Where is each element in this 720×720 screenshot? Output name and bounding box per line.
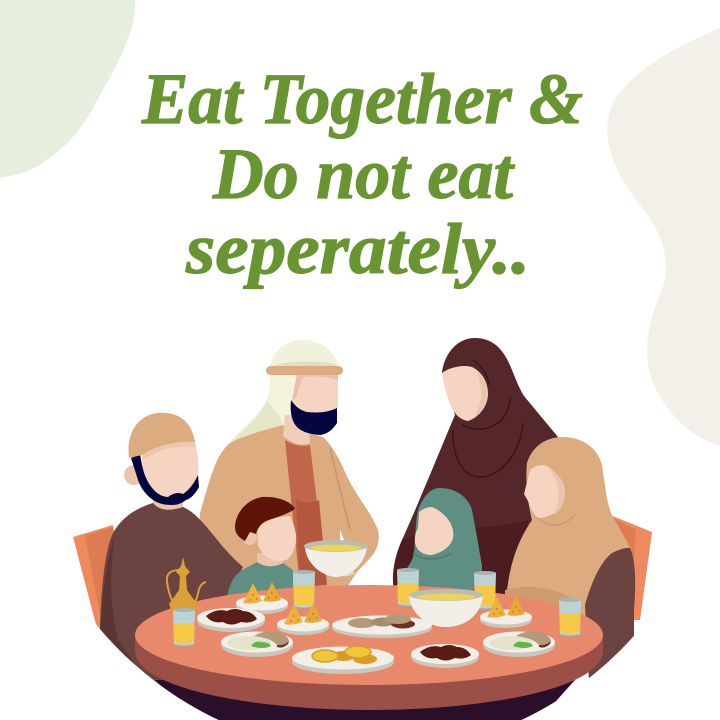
headcloth bbox=[230, 375, 297, 442]
background blob: right bbox=[607, 28, 720, 446]
title: seperately.. bbox=[185, 209, 530, 289]
bowl on table bbox=[409, 589, 483, 627]
shirt bbox=[285, 440, 327, 587]
title: Eat Together & bbox=[141, 59, 583, 139]
neck bbox=[283, 415, 310, 444]
beard bbox=[131, 454, 199, 505]
face bbox=[524, 465, 565, 518]
table side bbox=[135, 635, 603, 710]
boy bbox=[228, 497, 296, 600]
cap bbox=[128, 413, 195, 458]
seated man in brown bbox=[100, 413, 243, 700]
golden fritter plate bbox=[292, 646, 394, 674]
biscuit plate bbox=[332, 614, 432, 638]
ear bbox=[124, 465, 140, 485]
face bbox=[415, 507, 453, 555]
cap bbox=[270, 340, 338, 368]
date plates bbox=[197, 608, 479, 668]
rice plates bbox=[221, 631, 555, 657]
standing man bbox=[200, 340, 379, 590]
head band bbox=[266, 366, 343, 375]
title: Do not eat bbox=[212, 134, 515, 214]
table base shadow bbox=[155, 680, 575, 720]
right chair bbox=[612, 516, 652, 620]
robe bbox=[200, 425, 379, 590]
shirt bbox=[228, 562, 293, 595]
jug bbox=[167, 557, 206, 612]
body bbox=[100, 503, 243, 700]
samosa plates bbox=[236, 582, 532, 635]
woman in tan hijab bbox=[505, 437, 635, 700]
neck bbox=[153, 495, 183, 510]
neck bbox=[257, 553, 283, 566]
title bbox=[141, 59, 583, 289]
hijab folds bbox=[453, 423, 523, 477]
table top bbox=[135, 585, 603, 685]
face bbox=[292, 376, 338, 412]
illustration: family meal bbox=[73, 338, 652, 720]
held bowl bbox=[304, 540, 368, 577]
large woman in maroon hijab bbox=[393, 338, 558, 600]
background blob: top left bbox=[0, 0, 135, 178]
brown chair-back arm bbox=[585, 548, 636, 678]
face bbox=[142, 442, 198, 498]
girl in teal hijab bbox=[395, 488, 482, 590]
beard bbox=[291, 400, 337, 435]
glasses of juice bbox=[173, 568, 581, 646]
ear bbox=[243, 531, 257, 545]
left chair bbox=[73, 525, 114, 640]
face bbox=[257, 516, 296, 561]
face bbox=[442, 366, 488, 421]
hair bbox=[235, 497, 295, 541]
